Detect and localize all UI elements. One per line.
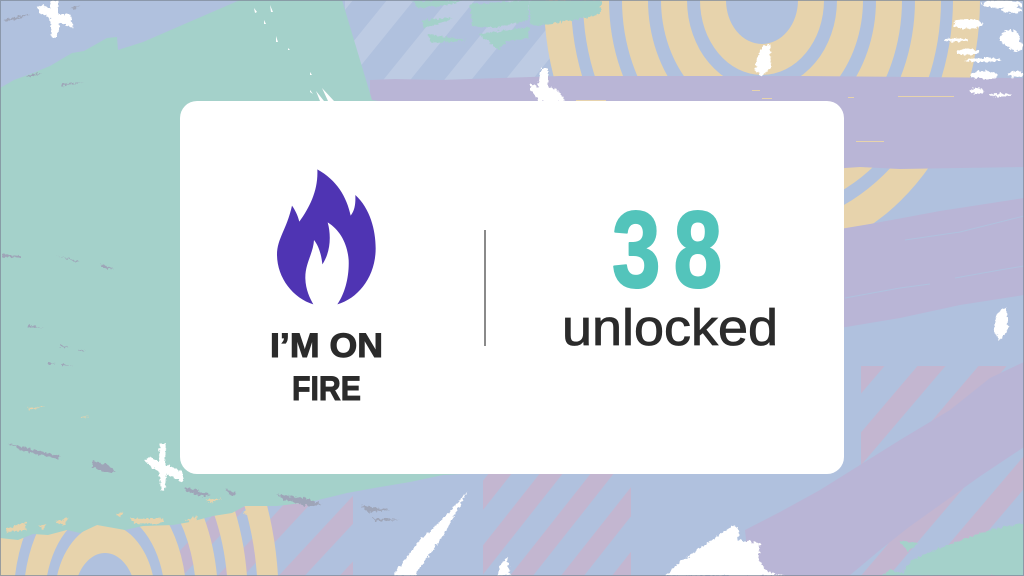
background: small white specks on the green bbox=[254, 5, 334, 101]
background: lilac brush bands bbox=[370, 76, 1024, 576]
label: unlocked: unlocked bbox=[562, 299, 778, 356]
background: grey grunge flecks bbox=[2, 6, 400, 521]
heading: I'M ON FIRE: I’M ON bbox=[270, 327, 383, 365]
background: green splashes bbox=[413, 0, 1024, 576]
background: concentric arcs top right bbox=[544, 0, 980, 260]
background: tan flecks along the green edge bbox=[6, 406, 262, 532]
heading: I'M ON FIRE: FIRE bbox=[292, 370, 361, 408]
heading: I'M ON FIRE bbox=[270, 327, 383, 408]
icon: purple flame bbox=[277, 169, 376, 304]
number: 38: 38 bbox=[612, 189, 722, 310]
background: green brush shape bbox=[0, 0, 500, 540]
white card bbox=[180, 101, 844, 474]
background: tan flecks on the lilac band bbox=[576, 90, 954, 142]
background: concentric arcs bottom left bbox=[0, 339, 278, 576]
background: thin blue streaks in the lilac band bbox=[845, 216, 1024, 298]
divider bbox=[484, 230, 486, 346]
